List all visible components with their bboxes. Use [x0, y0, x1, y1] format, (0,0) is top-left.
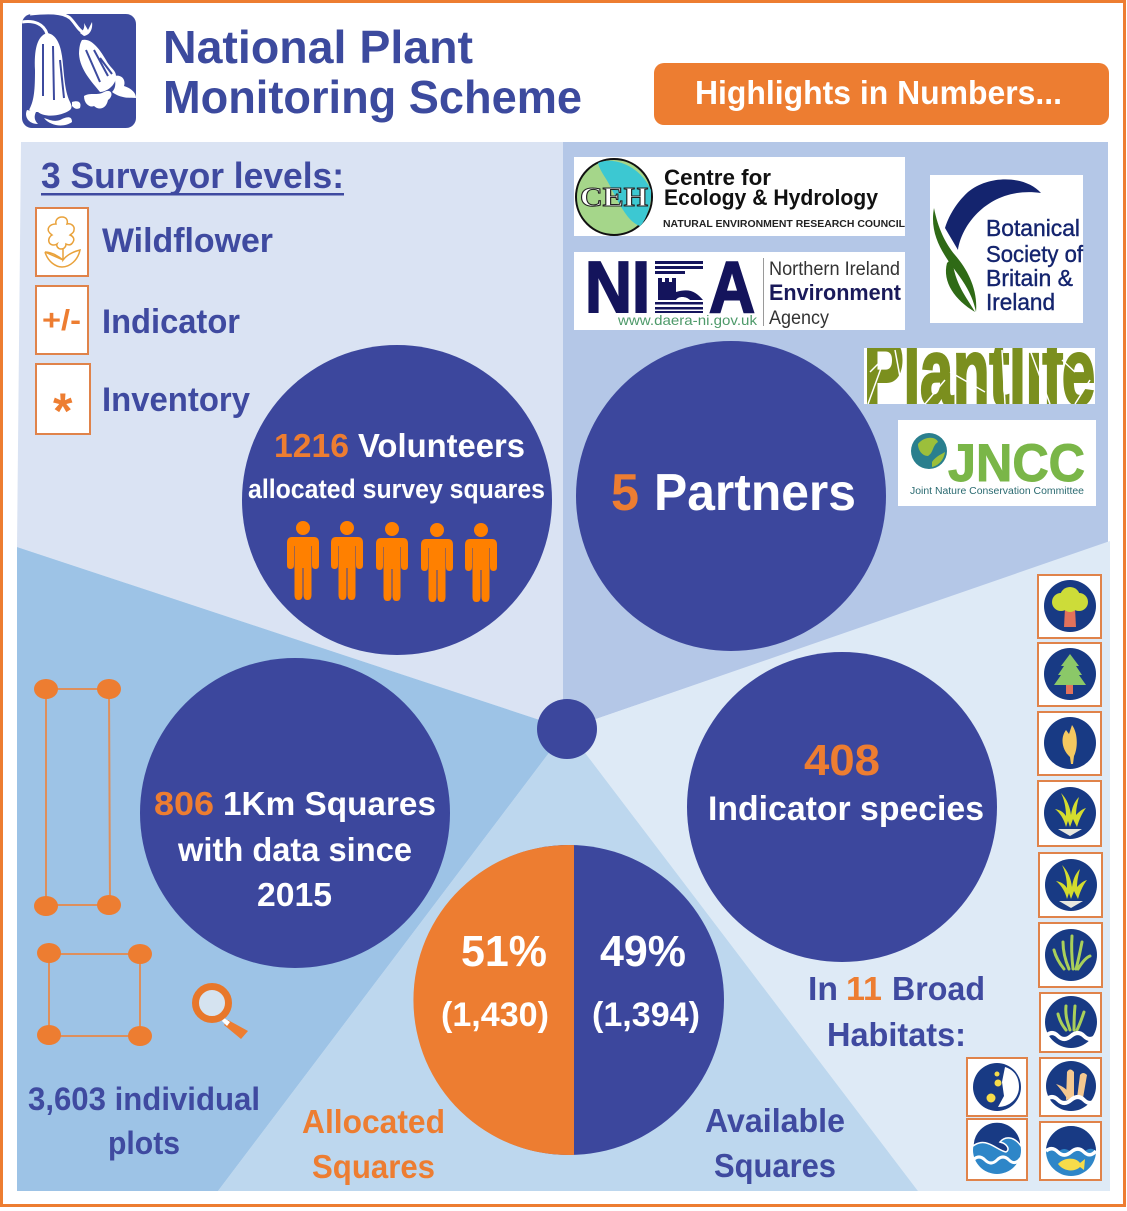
circle: volunteers: allocated survey squares: [248, 474, 545, 504]
icon: inventory level: [36, 364, 90, 439]
circle: partners: 5: [611, 464, 639, 522]
circle: 1km squares: 1Km Squares: [223, 785, 436, 822]
pie chart: allocated vs available squares: 51%: [461, 927, 547, 976]
icon: marine wave habitat: [967, 1119, 1027, 1180]
icon: indicator level: +/-: [42, 305, 81, 337]
circle: indicator species: 408: [804, 736, 880, 785]
circle: indicator species: Indicator species: [708, 790, 984, 828]
label: available squares: Available: [705, 1102, 845, 1139]
icon: NPMS bellflower logo: [22, 13, 136, 128]
label: broad habitats: 11: [846, 970, 882, 1007]
logo: JNCC: JNCC: [948, 434, 1085, 493]
circle: volunteers: [242, 345, 552, 655]
logo: NIEA: Agency: [769, 308, 829, 329]
highlights banner: [654, 63, 1109, 125]
pie chart: allocated vs available squares: (1,394): [592, 996, 700, 1034]
label: available squares: Squares: [714, 1147, 836, 1184]
circle: indicator species: [687, 652, 997, 962]
circle: 1km squares: with data since: [177, 831, 412, 868]
icon: coniferous woodland habitat: [1038, 643, 1101, 706]
logo: NIEA: [574, 248, 905, 330]
circle: volunteers: Volunteers: [358, 427, 525, 464]
logo: BSBI: Botanical: [986, 215, 1080, 241]
pie chart: allocated vs available squares: (1,430): [441, 996, 549, 1034]
panel: allocated squares background: [218, 729, 918, 1191]
pie chart: allocated vs available squares: [413, 845, 724, 1155]
logo: CEH: NATURAL ENVIRONMENT RESEARCH COUNCIL: [663, 219, 905, 230]
logo: JNCC: Joint Nature Conservation Committee: [910, 486, 1084, 497]
title: National Plant: [163, 21, 473, 73]
label: indicator: Indicator: [102, 303, 240, 341]
circle: volunteers: 1216: [274, 427, 349, 464]
label: inventory: Inventory: [102, 381, 250, 419]
icon: grassland habitat: [1038, 781, 1101, 846]
label: available squares: [705, 1102, 845, 1184]
icon: heath grassland habitat: [1039, 853, 1102, 917]
logo: CEH: [574, 157, 905, 236]
title: Monitoring Scheme: [163, 71, 582, 123]
logo: CEH: Centre for: [664, 165, 771, 190]
icon: arable habitat: [1038, 712, 1101, 775]
heading: surveyor levels: 3 Surveyor levels:: [41, 155, 344, 196]
icon: wetland habitat: [1040, 1058, 1101, 1116]
icon: indicator level: [36, 286, 88, 354]
icon: wildflower level: [36, 208, 88, 276]
logo: Plantlife: [864, 348, 1095, 404]
label: broad habitats: [808, 970, 985, 1053]
label: allocated squares: Allocated: [302, 1103, 445, 1140]
logo: BSBI: Society of: [986, 241, 1084, 267]
icon: tall plot: [34, 679, 121, 916]
label: individual plots: plots: [108, 1125, 180, 1161]
logo: NIEA: A: [709, 248, 755, 328]
logo: NIEA: NI: [585, 248, 650, 328]
circle: 1km squares: 806: [154, 785, 214, 822]
logo: CEH: CEH: [580, 182, 648, 212]
icon: inventory level: *: [53, 383, 73, 439]
logo: NIEA: Northern Ireland: [769, 259, 900, 280]
label: allocated squares: [302, 1103, 445, 1185]
label: broad habitats: Habitats:: [827, 1016, 966, 1053]
logo: BSBI: [930, 175, 1084, 323]
logo: CEH: Ecology & Hydrology: [664, 185, 879, 210]
icon: five people: [287, 521, 497, 602]
logo: JNCC: [898, 420, 1096, 506]
label: broad habitats: Broad: [892, 970, 985, 1007]
logo: NIEA: www.daera-ni.gov.uk: [617, 312, 758, 328]
circle: partners: Partners: [654, 464, 856, 522]
panel: partners background: [563, 142, 1108, 729]
circle: 1km squares: 2015: [257, 876, 332, 913]
icon: bog habitat: [1040, 993, 1101, 1052]
icon: square plot: [37, 943, 152, 1046]
label: individual plots: [28, 1081, 260, 1161]
pie chart: allocated vs available squares: 49%: [600, 927, 686, 976]
label: wildflower: Wildflower: [102, 222, 273, 260]
title: [163, 21, 582, 123]
panel: surveyor levels background: [17, 142, 567, 729]
logo: BSBI: Britain &: [986, 265, 1073, 291]
label: individual plots: 3,603 individual: [28, 1081, 260, 1117]
panel: species and habitats background: [567, 541, 1110, 1191]
label: broad habitats: In: [808, 970, 838, 1007]
icon: marsh habitat: [1039, 923, 1102, 987]
logo: BSBI: Ireland: [986, 289, 1055, 315]
icon: magnifying glass: [196, 986, 248, 1039]
icon: rocky coast habitat: [967, 1058, 1027, 1116]
circle: 1km squares: [140, 658, 450, 968]
circle: partners: [576, 341, 886, 651]
highlights banner: Highlights in Numbers...: [695, 74, 1062, 111]
logo: NIEA: Environment: [769, 280, 902, 305]
icon: broadleaf woodland habitat: [1038, 575, 1101, 638]
center dot: [537, 699, 597, 759]
panel: plots background: [17, 547, 567, 1191]
label: allocated squares: Squares: [312, 1148, 435, 1185]
icon: freshwater habitat: [1040, 1122, 1101, 1180]
